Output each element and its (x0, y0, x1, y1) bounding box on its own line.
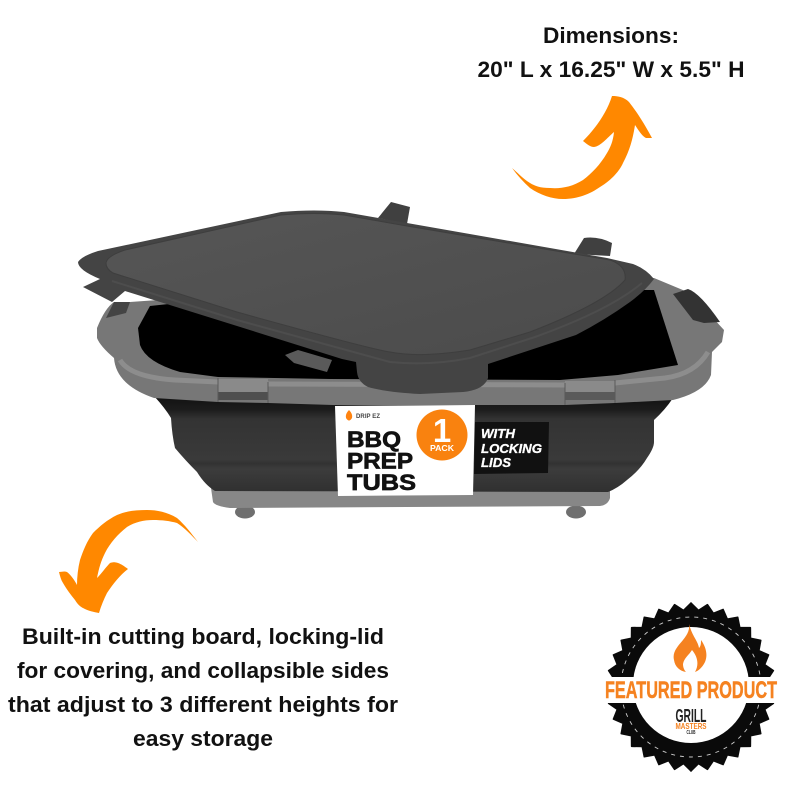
with locking lids box: WITH (481, 427, 516, 441)
feet (235, 506, 586, 518)
lid top surface (106, 214, 625, 355)
arrow: down toward description (59, 510, 198, 613)
inner clip (285, 350, 332, 372)
description text: easy storage (133, 726, 273, 751)
lid outer flange (78, 210, 654, 394)
rim clip recesses (218, 378, 615, 405)
lid (78, 210, 654, 394)
grill masters club logo (676, 706, 707, 736)
heading: dimensions: 20" L x 16.25" W x 5.5" H (478, 57, 744, 82)
lid flange ridge (112, 281, 642, 363)
with locking lids box: LOCKING (481, 442, 542, 456)
left handle (106, 302, 130, 318)
with locking lids box: LIDS (481, 456, 512, 470)
badge serrated ring (607, 603, 775, 771)
grill masters club logo: CLUB (686, 730, 696, 736)
badge banner band (600, 677, 782, 703)
badge: featured product (600, 603, 782, 771)
badge centre (633, 627, 749, 743)
product label (335, 405, 549, 496)
description text: for covering, and collapsible sides (17, 658, 389, 683)
label title: PREP (347, 448, 413, 474)
description text (8, 624, 398, 751)
collapsible body (154, 396, 673, 492)
heading: dimensions (478, 23, 744, 82)
badge stitching (621, 617, 761, 757)
description text: Built-in cutting board, locking-lid (22, 624, 384, 649)
right handle (673, 289, 720, 323)
rim top face (120, 352, 708, 385)
label card (335, 405, 475, 496)
grill masters club logo: MASTERS (676, 721, 707, 731)
with locking lids box (474, 422, 549, 474)
arrow: up toward dimensions (512, 96, 652, 199)
badge flame (674, 624, 706, 672)
label title: TUBS (347, 470, 416, 495)
1 pack badge (416, 410, 468, 460)
grill masters club logo: GRILL (676, 706, 706, 726)
1 pack badge: 1 (433, 412, 451, 449)
label title (347, 427, 416, 495)
description text: that adjust to 3 different heights for (8, 692, 398, 717)
tub interior (138, 290, 678, 380)
rim (97, 278, 724, 405)
product: BBQ prep tub (78, 202, 724, 518)
drip ez logo: DRIP EZ (356, 414, 380, 420)
heading: dimensions: Dimensions: (543, 23, 679, 48)
lid back tabs (378, 202, 612, 256)
1 pack badge: PACK (430, 443, 455, 453)
label title: BBQ (347, 427, 401, 452)
base tray (211, 488, 610, 508)
drip ez logo (346, 410, 380, 420)
